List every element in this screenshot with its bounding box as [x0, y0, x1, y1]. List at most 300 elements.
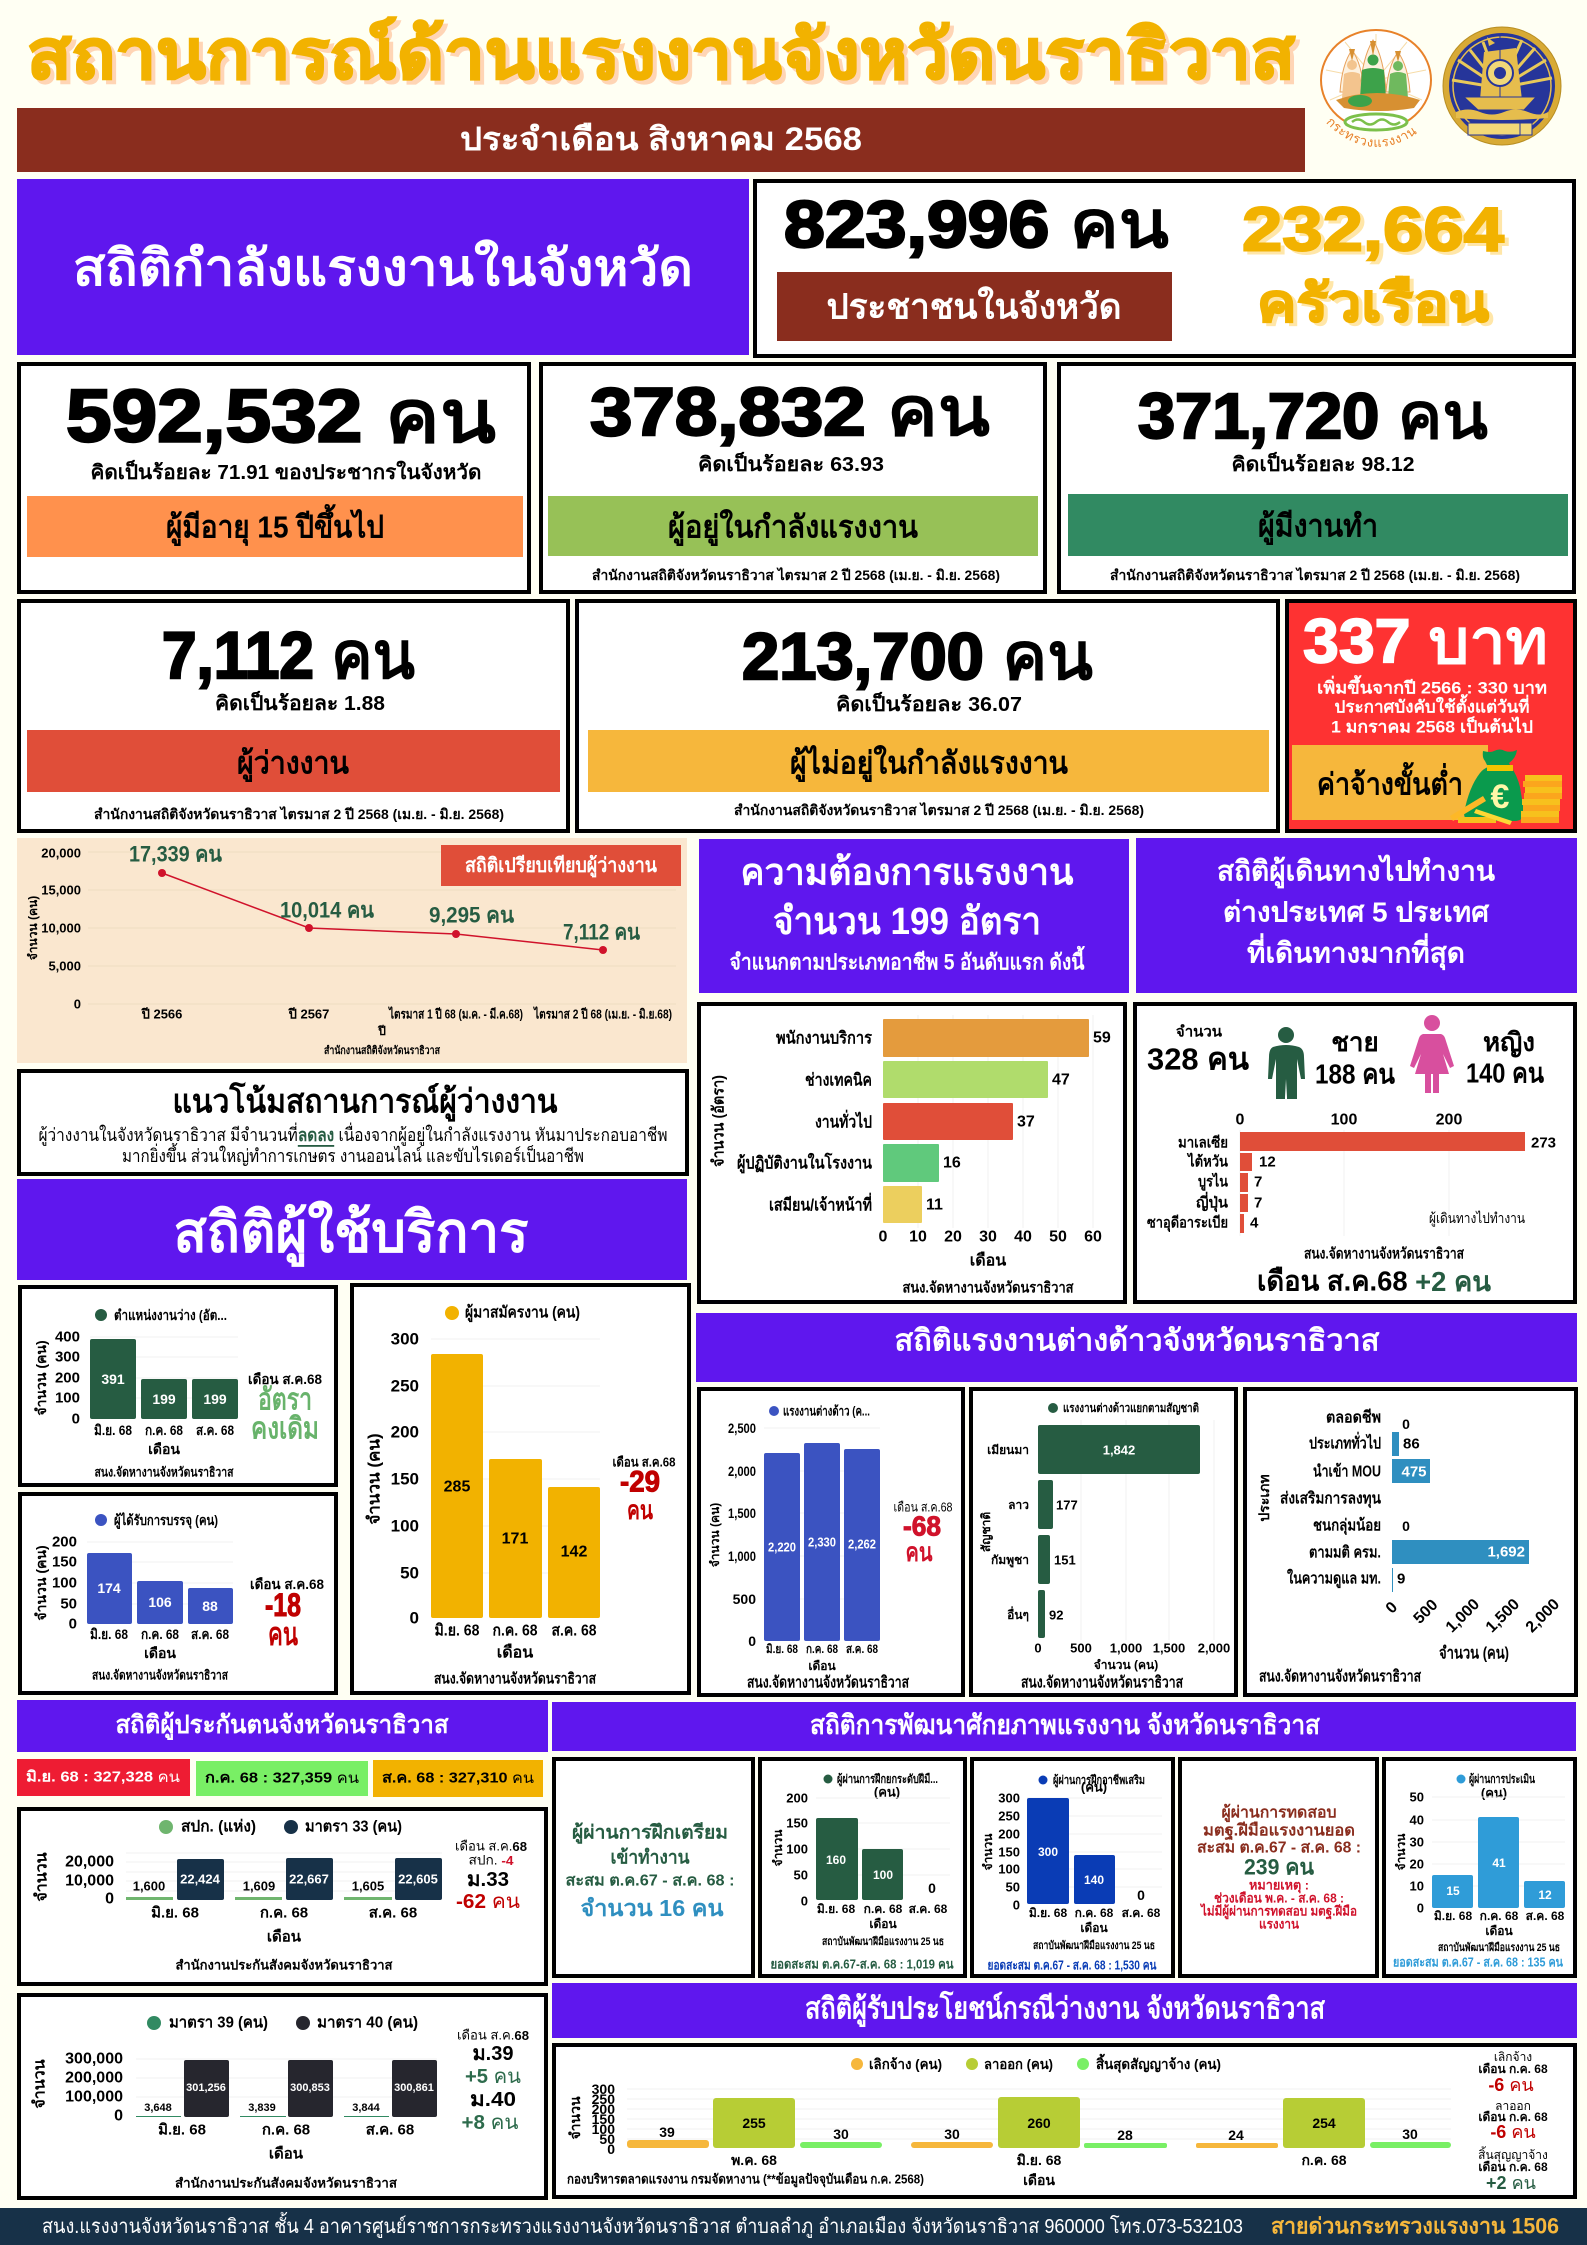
panel: unemployment comparison line chart — [17, 838, 687, 1063]
panel: overseas travel chart: 140 คน — [1466, 1058, 1544, 1088]
panel: section 33 chart: 0 — [105, 1890, 114, 1908]
panel: applicants chart — [352, 1285, 689, 1693]
panel: skill upgrade training chart: ส.ค. 68 — [909, 1902, 948, 1916]
panel: migrant totals chart: 2,500 — [728, 1420, 756, 1436]
legend: ลาออก (คน) — [984, 2056, 1053, 2072]
panel: labour demand bar chart: 16 — [943, 1154, 961, 1172]
legend — [159, 1818, 402, 1836]
panel: overseas travel chart: ผู้เดินทางไปทำงาน — [1429, 1210, 1525, 1227]
chart title tag: สถิติเปรียบเทียบผู้ว่างงาน — [465, 854, 657, 879]
panel: labour demand bar chart: สนง.จัดหางานจังหวัดนราธิวาส — [902, 1278, 1074, 1296]
panel: overseas travel chart — [1135, 1004, 1575, 1302]
panel: unemployment benefit chart: -6 คน — [1490, 2122, 1536, 2142]
panel: unemployment comparison line chart: ไตรมาส 2 ปี 68 (เม.ย. - มิ.ย.68) — [532, 1006, 672, 1022]
insured chip: August: ส.ค. 68 : 327,310 คน — [382, 1770, 534, 1786]
panel: placements chart: 88 — [202, 1598, 218, 1614]
panel: section 33 chart: 22,667 — [289, 1872, 329, 1886]
panel: overseas travel chart: 12 — [1259, 1154, 1276, 1170]
panel: migrant totals chart: 2,330 — [808, 1534, 836, 1550]
panel: outside labour force: 213,700 คน — [742, 619, 1093, 693]
panel: section 39/40 chart: 301,256 — [186, 2082, 226, 2094]
panel: labour demand bar chart: 37 — [1017, 1114, 1035, 1130]
panel: section 33 chart: -62 คน — [456, 1891, 520, 1913]
panel: employed: คิดเป็นร้อยละ 98.12 — [1232, 451, 1414, 476]
panel: labour demand bar chart: 11 — [926, 1196, 943, 1214]
panel: placements chart: 0 — [69, 1616, 77, 1632]
panel: in labour force: 378,832 คน — [590, 374, 990, 450]
heading: labour demand: ความต้องการแรงงาน — [740, 852, 1074, 892]
heading: unemployment benefit — [552, 1983, 1577, 2038]
legend — [851, 2053, 1221, 2073]
panel: minimum wage: ค่าจ้างขั้นต่ำ — [1317, 762, 1463, 802]
panel: skills assessment chart: 0 — [1417, 1900, 1424, 1916]
panel: migrant nationality chart: 1,500 — [1153, 1640, 1185, 1656]
panel: section 33 chart — [19, 1809, 546, 1984]
panel: section 39/40 chart: 300,853 — [290, 2082, 330, 2094]
panel: supplementary occupation training chart: ยอดสะสม ต.ค.67 - ส.ค. 68 : 1,530 คน — [988, 1958, 1157, 1972]
panel: supplementary occupation training chart: 300 — [998, 1790, 1020, 1806]
panel: unemployment benefit chart: 30 — [944, 2126, 960, 2142]
panel: unemployment benefit chart: 39 — [659, 2124, 675, 2140]
panel: migrant totals chart: ก.ค. 68 — [806, 1642, 838, 1656]
panel: skills assessment chart — [1384, 1759, 1575, 1976]
title: สถานการณ์ด้านแรงงานจังหวัดนราธิวาส — [27, 17, 1296, 93]
panel: overseas travel chart: 328 คน — [1147, 1042, 1249, 1076]
panel: applicants chart: เดือน — [497, 1644, 533, 1662]
panel: migrant totals chart: 1,500 — [728, 1505, 756, 1521]
panel: overseas travel chart: หญิง — [1483, 1027, 1535, 1058]
panel: skill upgrade training chart: 100 — [786, 1842, 808, 1856]
panel: skills assessment chart: เดือน — [1485, 1924, 1513, 1938]
panel: migrant totals chart: จำนวน (คน) — [708, 1503, 722, 1567]
panel: applicants chart: 142 — [561, 1544, 587, 1560]
panel: labour demand bar chart: ช่างเทคนิค — [805, 1070, 872, 1090]
panel: migrant totals chart: 500 — [733, 1591, 756, 1607]
panel: population — [755, 181, 1574, 356]
panel: migrant type chart: 0 — [1402, 1416, 1410, 1432]
panel: applicants chart: 171 — [502, 1530, 528, 1548]
panel: unemployment benefit chart: 100 — [592, 2121, 615, 2137]
legend — [1456, 1772, 1536, 1800]
panel: vacancies chart: 199 — [203, 1391, 227, 1407]
panel: overseas travel chart: 273 — [1531, 1134, 1556, 1152]
panel: placements chart: เดือน ส.ค.68 — [250, 1576, 324, 1592]
panel: section 33 chart: 22,424 — [180, 1872, 221, 1886]
panel: skill upgrade training chart: ก.ค. 68 — [864, 1902, 903, 1916]
panel: placements chart: เดือน — [144, 1645, 176, 1661]
panel: unemployed: สำนักงานสถิติจังหวัดนราธิวาส ไตรมาส 2 ปี 2568 (เม.ย. - มิ.ย. 2568) — [94, 805, 504, 822]
heading: overseas travel: ที่เดินทางมากที่สุด — [1247, 932, 1465, 970]
legend: มาตรา 40 (คน) — [317, 2014, 418, 2032]
panel: employed: สำนักงานสถิติจังหวัดนราธิวาส ไตรมาส 2 ปี 2568 (เม.ย. - มิ.ย. 2568) — [1110, 566, 1520, 583]
panel: skills assessment chart: จำนวน — [1394, 1833, 1408, 1870]
panel: migrant nationality chart: สนง.จัดหางานจังหวัดนราธิวาส — [1021, 1674, 1183, 1692]
panel: supplementary occupation training chart: ส.ค. 68 — [1122, 1906, 1161, 1920]
panel: migrant totals chart: 1,000 — [728, 1548, 756, 1564]
panel: applicants chart: 200 — [391, 1422, 419, 1442]
panel: migrant nationality chart: กัมพูชา — [991, 1553, 1029, 1568]
panel: in labour force — [541, 364, 1045, 592]
panel: skill upgrade training chart: 0 — [928, 1880, 936, 1896]
panel: applicants chart: 300 — [391, 1330, 419, 1348]
panel: pre-employment training: เข้าทำงาน — [610, 1846, 690, 1868]
panel: skill upgrade training chart — [760, 1759, 965, 1976]
panel: section 39/40 chart: 3,648 — [144, 2102, 172, 2114]
legend: แรงงานต่างด้าว (ค... — [783, 1404, 870, 1418]
panel: section 39/40 chart: เดือน ส.ค.68 — [457, 2028, 529, 2042]
panel: vacancies chart: 100 — [55, 1390, 80, 1406]
footer: สนง.แรงงานจังหวัดนราธิวาส ชั้น 4 อาคารศูนย์ราชการกระทรวงแรงงานจังหวัดนราธิวาส ตำบลลำภู อำเภอเมือง จังหวัดนราธิวาส 960000 โทร.073-532103 — [42, 2212, 1243, 2239]
legend: ผู้ผ่านการประเมิน — [1469, 1772, 1536, 1787]
legend: มาตรา 39 (คน) — [169, 2014, 268, 2032]
insured chip: June — [17, 1759, 190, 1796]
panel: migrant type chart: 2,000 — [1523, 1596, 1563, 1636]
panel: unemployment benefit chart: 300 — [592, 2081, 615, 2097]
panel: overseas travel chart: 4 — [1250, 1214, 1259, 1232]
panel: skills standard test: มตฐ.ฝีมือแรงงานยอด — [1203, 1820, 1355, 1840]
panel: section 33 chart: มิ.ย. 68 — [151, 1904, 199, 1922]
panel: supplementary occupation training chart: 300 — [1038, 1845, 1058, 1859]
panel: applicants chart: ส.ค. 68 — [552, 1622, 597, 1640]
panel: migrant nationality chart: 92 — [1049, 1608, 1063, 1622]
panel: section 39/40 chart: มิ.ย. 68 — [158, 2120, 206, 2138]
panel: unemployment benefit chart: ลาออก — [1495, 2099, 1531, 2113]
legend: (คน) — [1481, 1786, 1507, 1800]
panel: unemployment benefit chart: 250 — [592, 2091, 615, 2107]
panel: skill upgrade training chart: ยอดสะสม ต.ค.67-ส.ค. 68 : 1,019 คน — [770, 1956, 954, 1972]
heading: skills development: สถิติการพัฒนาศักยภาพแรงงาน จังหวัดนราธิวาส — [810, 1710, 1320, 1740]
panel: migrant nationality chart: ลาว — [1008, 1498, 1029, 1512]
legend — [95, 1511, 218, 1529]
panel: supplementary occupation training chart: 140 — [1084, 1873, 1104, 1887]
panel: in labour force: สำนักงานสถิติจังหวัดนราธิวาส ไตรมาส 2 ปี 2568 (เม.ย. - มิ.ย. 2568) — [592, 566, 1000, 583]
panel: section 39/40 chart: 3,839 — [248, 2102, 276, 2114]
panel: section 33 chart: ม.33 — [467, 1869, 509, 1891]
panel: overseas travel chart: 200 — [1436, 1112, 1462, 1128]
legend: ผู้ได้รับการบรรจุ (คน) — [114, 1511, 218, 1529]
panel: unemployment benefit chart: เดือน ก.ค. 68 — [1478, 2062, 1548, 2076]
panel: migrant nationality chart — [971, 1389, 1236, 1695]
panel: migrant type chart: ตลอดชีพ — [1326, 1408, 1381, 1426]
panel: unemployment benefit chart: 30 — [833, 2126, 849, 2142]
panel: migrant nationality chart: 1,000 — [1110, 1640, 1142, 1656]
panel: migrant nationality chart: 500 — [1070, 1640, 1092, 1656]
legend: สปก. (แห่ง) — [181, 1818, 256, 1836]
panel: section 39/40 chart: ก.ค. 68 — [262, 2122, 310, 2138]
month banner — [17, 108, 1305, 172]
panel: skills assessment chart: 40 — [1410, 1812, 1424, 1828]
panel: unemployment benefit chart: พ.ค. 68 — [731, 2152, 777, 2168]
panel: skills assessment chart: ส.ค. 68 — [1526, 1909, 1565, 1923]
panel: section 39/40 chart: ส.ค. 68 — [366, 2122, 414, 2138]
legend: (คน) — [874, 1784, 900, 1800]
panel: labour demand bar chart: 20 — [944, 1228, 962, 1246]
legend: ตำแหน่งงานว่าง (อัต... — [114, 1307, 227, 1323]
panel: skills standard test: สะสม ต.ค.67 - ส.ค. 68 : — [1197, 1840, 1361, 1856]
panel: overseas travel chart: มาเลเซีย — [1178, 1134, 1228, 1152]
panel: migrant totals chart: เดือน — [808, 1659, 836, 1673]
panel: vacancies chart: เดือน — [148, 1441, 180, 1457]
panel: unemployment comparison line chart: 7,112 คน — [563, 920, 640, 944]
heading: overseas travel: สถิติผู้เดินทางไปทำงาน — [1217, 854, 1495, 888]
icon: narathiwat province seal — [1443, 27, 1561, 145]
panel: section 39/40 chart: 0 — [114, 2108, 123, 2124]
panel: aged 15+: 592,532 คน — [66, 374, 496, 458]
panel: migrant nationality chart: 151 — [1054, 1552, 1076, 1568]
panel: migrant totals chart: คน — [906, 1537, 933, 1567]
panel: unemployment comparison line chart: 10,000 — [41, 920, 81, 936]
icon: woman — [1410, 1015, 1454, 1093]
panel: skills assessment chart: ก.ค. 68 — [1480, 1909, 1519, 1923]
panel: unemployed: 7,112 คน — [162, 618, 415, 692]
panel: skill upgrade training chart: 200 — [786, 1790, 808, 1806]
panel: labour demand bar chart: เสมียน/เจ้าหน้าที่ — [769, 1192, 872, 1214]
panel: migrant type chart: นำเข้า MOU — [1313, 1462, 1381, 1480]
panel: migrant type chart: 0 — [1402, 1518, 1410, 1534]
panel: labour demand bar chart: พนักงานบริการ — [776, 1028, 873, 1048]
panel: placements chart: 200 — [52, 1534, 77, 1550]
panel: section 39/40 chart: ม.40 — [470, 2089, 516, 2111]
insured chip: August — [373, 1760, 543, 1797]
panel: applicants chart: 285 — [444, 1478, 470, 1496]
panel: migrant totals chart: มิ.ย. 68 — [766, 1642, 798, 1656]
panel: section 39/40 chart: 300,861 — [394, 2082, 434, 2094]
panel: placements chart: 174 — [97, 1580, 121, 1596]
panel: applicants chart: เดือน ส.ค.68 — [612, 1454, 676, 1470]
panel: vacancies chart: 199 — [152, 1391, 176, 1407]
panel: migrant nationality chart: 177 — [1056, 1498, 1078, 1512]
panel: applicants chart: -29 — [620, 1466, 660, 1498]
panel: unemployment benefit chart: 24 — [1228, 2127, 1244, 2143]
heading: service users: สถิติผู้ใช้บริการ — [174, 1200, 528, 1268]
panel: minimum wage: เพิ่มขึ้นจากปี 2566 : 330 บาท — [1317, 674, 1547, 698]
panel: supplementary occupation training chart: 0 — [1137, 1887, 1145, 1903]
panel: section 39/40 chart: จำนวน — [30, 2059, 48, 2109]
panel: migrant nationality chart: 1,842 — [1103, 1442, 1135, 1458]
panel: migrant type chart: จำนวน (คน) — [1439, 1644, 1509, 1662]
panel: section 33 chart: เดือน ส.ค.68 — [455, 1838, 527, 1854]
panel: vacancies chart: คงเดิม — [251, 1412, 319, 1446]
panel: population: ครัวเรือน — [1261, 278, 1494, 336]
panel: skills standard test: แรงงาน — [1259, 1916, 1299, 1932]
panel: section 33 chart: ส.ค. 68 — [369, 1904, 417, 1922]
panel: supplementary occupation training chart: มิ.ย. 68 — [1029, 1906, 1067, 1920]
panel: migrant type chart: 0 — [1383, 1599, 1401, 1617]
panel: pre-employment training: ผู้ผ่านการฝึกเตรียม — [572, 1822, 728, 1844]
panel: skills assessment chart: 20 — [1410, 1856, 1424, 1872]
heading: overseas travel: ต่างประเทศ 5 ประเทศ — [1223, 896, 1490, 928]
panel: section 33 chart: 1,605 — [352, 1878, 384, 1894]
panel: placements chart: ส.ค. 68 — [191, 1626, 229, 1642]
panel: skill upgrade training chart: 0 — [801, 1894, 808, 1908]
panel: unemployment benefit chart: สิ้นสุญญาจ้าง — [1478, 2146, 1548, 2163]
panel: migrant totals chart: -68 — [903, 1510, 941, 1542]
panel: unemployment comparison line chart: 15,000 — [41, 882, 81, 898]
panel: unemployment benefit chart: เดือน ก.ค. 68 — [1478, 2160, 1548, 2174]
panel: migrant type chart: 9 — [1397, 1570, 1405, 1588]
icon: money bag and coins: € — [1491, 778, 1510, 816]
panel: migrant type chart: ชนกลุ่มน้อย — [1313, 1516, 1381, 1536]
panel: overseas travel chart: เดือน ส.ค.68 +2 คน — [1257, 1266, 1491, 1296]
chart title tag — [441, 845, 681, 886]
panel: supplementary occupation training chart: สถาบันพัฒนาฝีมือแรงงาน 25 นธ — [1033, 1939, 1155, 1952]
panel: section 39/40 chart: 100,000 — [65, 2088, 123, 2106]
panel: vacancies chart: ก.ค. 68 — [145, 1422, 183, 1438]
legend: แรงงานต่างด้าวแยกตามสัญชาติ — [1063, 1401, 1199, 1415]
panel: unemployment benefit chart — [554, 2045, 1575, 2197]
panel: unemployment comparison line chart: ปี 2567 — [288, 1006, 329, 1022]
panel: section 39/40 chart: สำนักงานประกันสังคมจังหวัดนราธิวาส — [175, 2176, 397, 2190]
panel: migrant type chart: 475 — [1401, 1464, 1427, 1480]
icon: man — [1268, 1027, 1305, 1099]
panel: supplementary occupation training chart: 250 — [998, 1808, 1020, 1824]
panel: unemployment benefit chart: 0 — [607, 2141, 615, 2157]
panel: unemployment benefit chart: +2 คน — [1486, 2173, 1536, 2193]
panel: placements chart: คน — [268, 1616, 298, 1652]
panel: supplementary occupation training chart: 50 — [1006, 1880, 1020, 1894]
panel: skills standard test: 239 คน — [1244, 1854, 1314, 1880]
panel: migrant type chart: 86 — [1403, 1436, 1420, 1452]
heading: migrant workers: สถิติแรงงานต่างด้าวจังหวัดนราธิวาส — [894, 1324, 1380, 1358]
panel: unemployment benefit chart: เดือน — [1023, 2172, 1055, 2188]
panel: overseas travel chart: ไต้หวัน — [1186, 1152, 1229, 1170]
panel: unemployment comparison line chart: จำนวน (คน) — [26, 896, 40, 960]
panel: employed — [1059, 364, 1574, 592]
panel: applicants chart: 0 — [410, 1608, 419, 1628]
insured chip: June: มิ.ย. 68 : 327,328 คน — [26, 1768, 180, 1786]
panel: minimum wage: ประกาศบังคับใช้ตั้งแต่วันที่ — [1334, 694, 1530, 716]
panel: applicants chart: คน — [627, 1495, 653, 1525]
legend: ผู้ผ่านการฝึกอาชีพเสริม — [1053, 1773, 1145, 1788]
panel: unemployment benefit chart: จำนวน — [567, 2096, 583, 2140]
panel: aged 15+ — [19, 364, 529, 592]
panel: skills assessment chart: 41 — [1492, 1856, 1506, 1870]
panel: migrant type chart: 1,000 — [1443, 1596, 1483, 1636]
legend: สิ้นสุดสัญญาจ้าง (คน) — [1096, 2053, 1221, 2073]
panel: overseas travel chart: 0 — [1236, 1112, 1245, 1128]
panel: skills assessment chart: 10 — [1410, 1878, 1424, 1894]
panel: migrant totals chart: 2,220 — [768, 1540, 796, 1554]
panel: minimum wage: 1 มกราคม 2568 เป็นต้นไป — [1331, 714, 1533, 736]
panel: unemployment comparison line chart: ไตรมาส 1 ปี 68 (ม.ค. - มี.ค.68) — [387, 1006, 523, 1022]
panel: migrant type chart: 500 — [1411, 1596, 1442, 1627]
title: สถานการณ์ด้านแรงงานจังหวัดนราธิวาส — [31, 21, 1300, 97]
panel: skills standard test: ไม่มีผู้ผ่านการทดสอบ มตฐ.ฝีมือ — [1199, 1902, 1357, 1920]
panel: unemployed: คิดเป็นร้อยละ 1.88 — [215, 690, 385, 715]
panel: unemployment trend text: ผู้ว่างงานในจังหวัดนราธิวาส มีจำนวนที่ลดลง เนื่องจากผู้อยู่ในกำลังแรงงาน หันมาประกอบอาชีพ — [38, 1122, 668, 1146]
panel: unemployment comparison line chart: ปี — [378, 1024, 386, 1038]
panel: placements chart: มิ.ย. 68 — [90, 1626, 128, 1642]
panel: section 33 chart: เดือน — [267, 1928, 302, 1946]
panel: vacancies chart: มิ.ย. 68 — [94, 1422, 132, 1438]
panel: labour demand bar chart: 60 — [1084, 1228, 1102, 1246]
panel: supplementary occupation training chart: 0 — [1013, 1898, 1020, 1912]
icon: money bag and coins — [1450, 750, 1562, 825]
panel: unemployment benefit chart: 50 — [599, 2131, 615, 2147]
insured chip: July — [196, 1761, 368, 1796]
panel: unemployment benefit chart: กองบริหารตลาดแรงงาน กรมจัดหางาน (**ข้อมูลปัจจุบันเดือน ก.ค. 2568) — [567, 2172, 924, 2188]
panel: section 39/40 chart: 200,000 — [65, 2070, 123, 2086]
panel: unemployment comparison line chart: 10,014 คน — [280, 898, 374, 922]
legend: มาตรา 33 (คน) — [305, 1818, 402, 1836]
panel: migrant type chart: 1,692 — [1487, 1544, 1525, 1560]
panel: population: 232,664 — [1242, 196, 1505, 264]
panel: migrant nationality chart: จำนวน (คน) — [1094, 1658, 1158, 1672]
insured chip: July: ก.ค. 68 : 327,359 คน — [205, 1770, 359, 1786]
panel: supplementary occupation training chart — [972, 1759, 1173, 1976]
panel: labour demand bar chart — [699, 1004, 1125, 1302]
heading: labour demand: จำแนกตามประเภทอาชีพ 5 อันดับแรก ดังนี้ — [730, 946, 1086, 974]
panel: migrant type chart: ในความดูแล มท. — [1287, 1568, 1381, 1590]
panel: placements chart: -18 — [265, 1587, 301, 1623]
panel: section 39/40 chart: เดือน — [269, 2146, 304, 2162]
panel: pre-employment training — [554, 1759, 753, 1976]
panel: section 33 chart: สำนักงานประกันสังคมจังหวัดนราธิวาส — [176, 1958, 393, 1972]
panel: unemployment benefit chart: 28 — [1117, 2127, 1133, 2143]
panel: vacancies chart: ส.ค. 68 — [196, 1422, 234, 1438]
legend: ผู้มาสมัครงาน (คน) — [465, 1304, 580, 1324]
heading: overseas travel — [1136, 838, 1577, 993]
panel: overseas travel chart: 7 — [1254, 1174, 1262, 1190]
panel: migrant nationality chart: 0 — [1034, 1640, 1042, 1656]
panel: labour demand bar chart: งานทั่วไป — [815, 1110, 872, 1132]
panel: skills standard test — [1180, 1759, 1377, 1976]
heading: insured persons — [17, 1700, 548, 1752]
panel: overseas travel chart: ชาย — [1331, 1027, 1379, 1057]
panel: labour demand bar chart: 0 — [879, 1228, 888, 1246]
panel: supplementary occupation training chart: 150 — [998, 1844, 1020, 1860]
panel: migrant totals chart: สนง.จัดหางานจังหวัดนราธิวาส — [747, 1674, 909, 1692]
panel: placements chart: 150 — [52, 1554, 77, 1570]
panel: aged 15+: คิดเป็นร้อยละ 71.91 ของประชากรในจังหวัด — [90, 459, 481, 484]
panel: population: 232,664 — [1246, 198, 1509, 268]
legend — [769, 1404, 870, 1418]
panel: overseas travel chart: ญี่ปุ่น — [1196, 1192, 1229, 1212]
panel: migrant totals chart: เดือน ส.ค.68 — [894, 1500, 952, 1514]
panel: migrant type chart: ประเภท — [1256, 1474, 1272, 1522]
panel: migrant type chart: สนง.จัดหางานจังหวัดนราธิวาส — [1259, 1668, 1421, 1686]
panel: overseas travel chart: 7 — [1254, 1194, 1262, 1212]
panel: applicants chart: สนง.จัดหางานจังหวัดนราธิวาส — [434, 1670, 597, 1688]
panel: minimum wage — [1287, 601, 1575, 831]
footer — [0, 2208, 1587, 2245]
panel: migrant type chart: 1,500 — [1483, 1596, 1523, 1636]
panel: section 33 chart: 22,605 — [398, 1872, 438, 1886]
panel: vacancies chart: จำนวน (คน) — [33, 1340, 49, 1416]
panel: outside labour force: ผู้ไม่อยู่ในกำลังแรงงาน — [790, 744, 1068, 782]
footer: สายด่วนกระทรวงแรงงาน 1506 — [1271, 2214, 1559, 2238]
panel: vacancies chart: 0 — [72, 1410, 80, 1428]
legend — [824, 1772, 938, 1800]
legend — [1038, 1773, 1145, 1794]
panel: unemployment benefit chart: 254 — [1312, 2115, 1336, 2131]
panel: outside labour force: คิดเป็นร้อยละ 36.07 — [836, 691, 1022, 716]
panel: applicants chart: 100 — [391, 1516, 419, 1536]
panel: labour demand bar chart: จำนวน (อัตรา) — [710, 1075, 728, 1167]
panel: migrant type chart: ประเภททั่วไป — [1309, 1432, 1381, 1452]
panel: skill upgrade training chart: เดือน — [869, 1917, 897, 1931]
panel: overseas travel chart: บูรไน — [1198, 1172, 1229, 1192]
panel: unemployment comparison line chart: 0 — [74, 996, 81, 1012]
panel: outside labour force: สำนักงานสถิติจังหวัดนราธิวาส ไตรมาส 2 ปี 2568 (เม.ย. - มิ.ย. 2568) — [734, 801, 1144, 818]
panel: population: ครัวเรือน — [1257, 275, 1490, 333]
panel: employed: ผู้มีงานทำ — [1258, 508, 1378, 546]
panel: applicants chart: ก.ค. 68 — [492, 1622, 538, 1640]
panel: labour force heading: สถิติกำลังแรงงานในจังหวัด — [73, 239, 693, 296]
panel: outside labour force — [577, 601, 1278, 831]
panel: skill upgrade training chart: 150 — [786, 1816, 808, 1830]
panel: migrant type chart: ตามมติ ครม. — [1309, 1544, 1381, 1562]
